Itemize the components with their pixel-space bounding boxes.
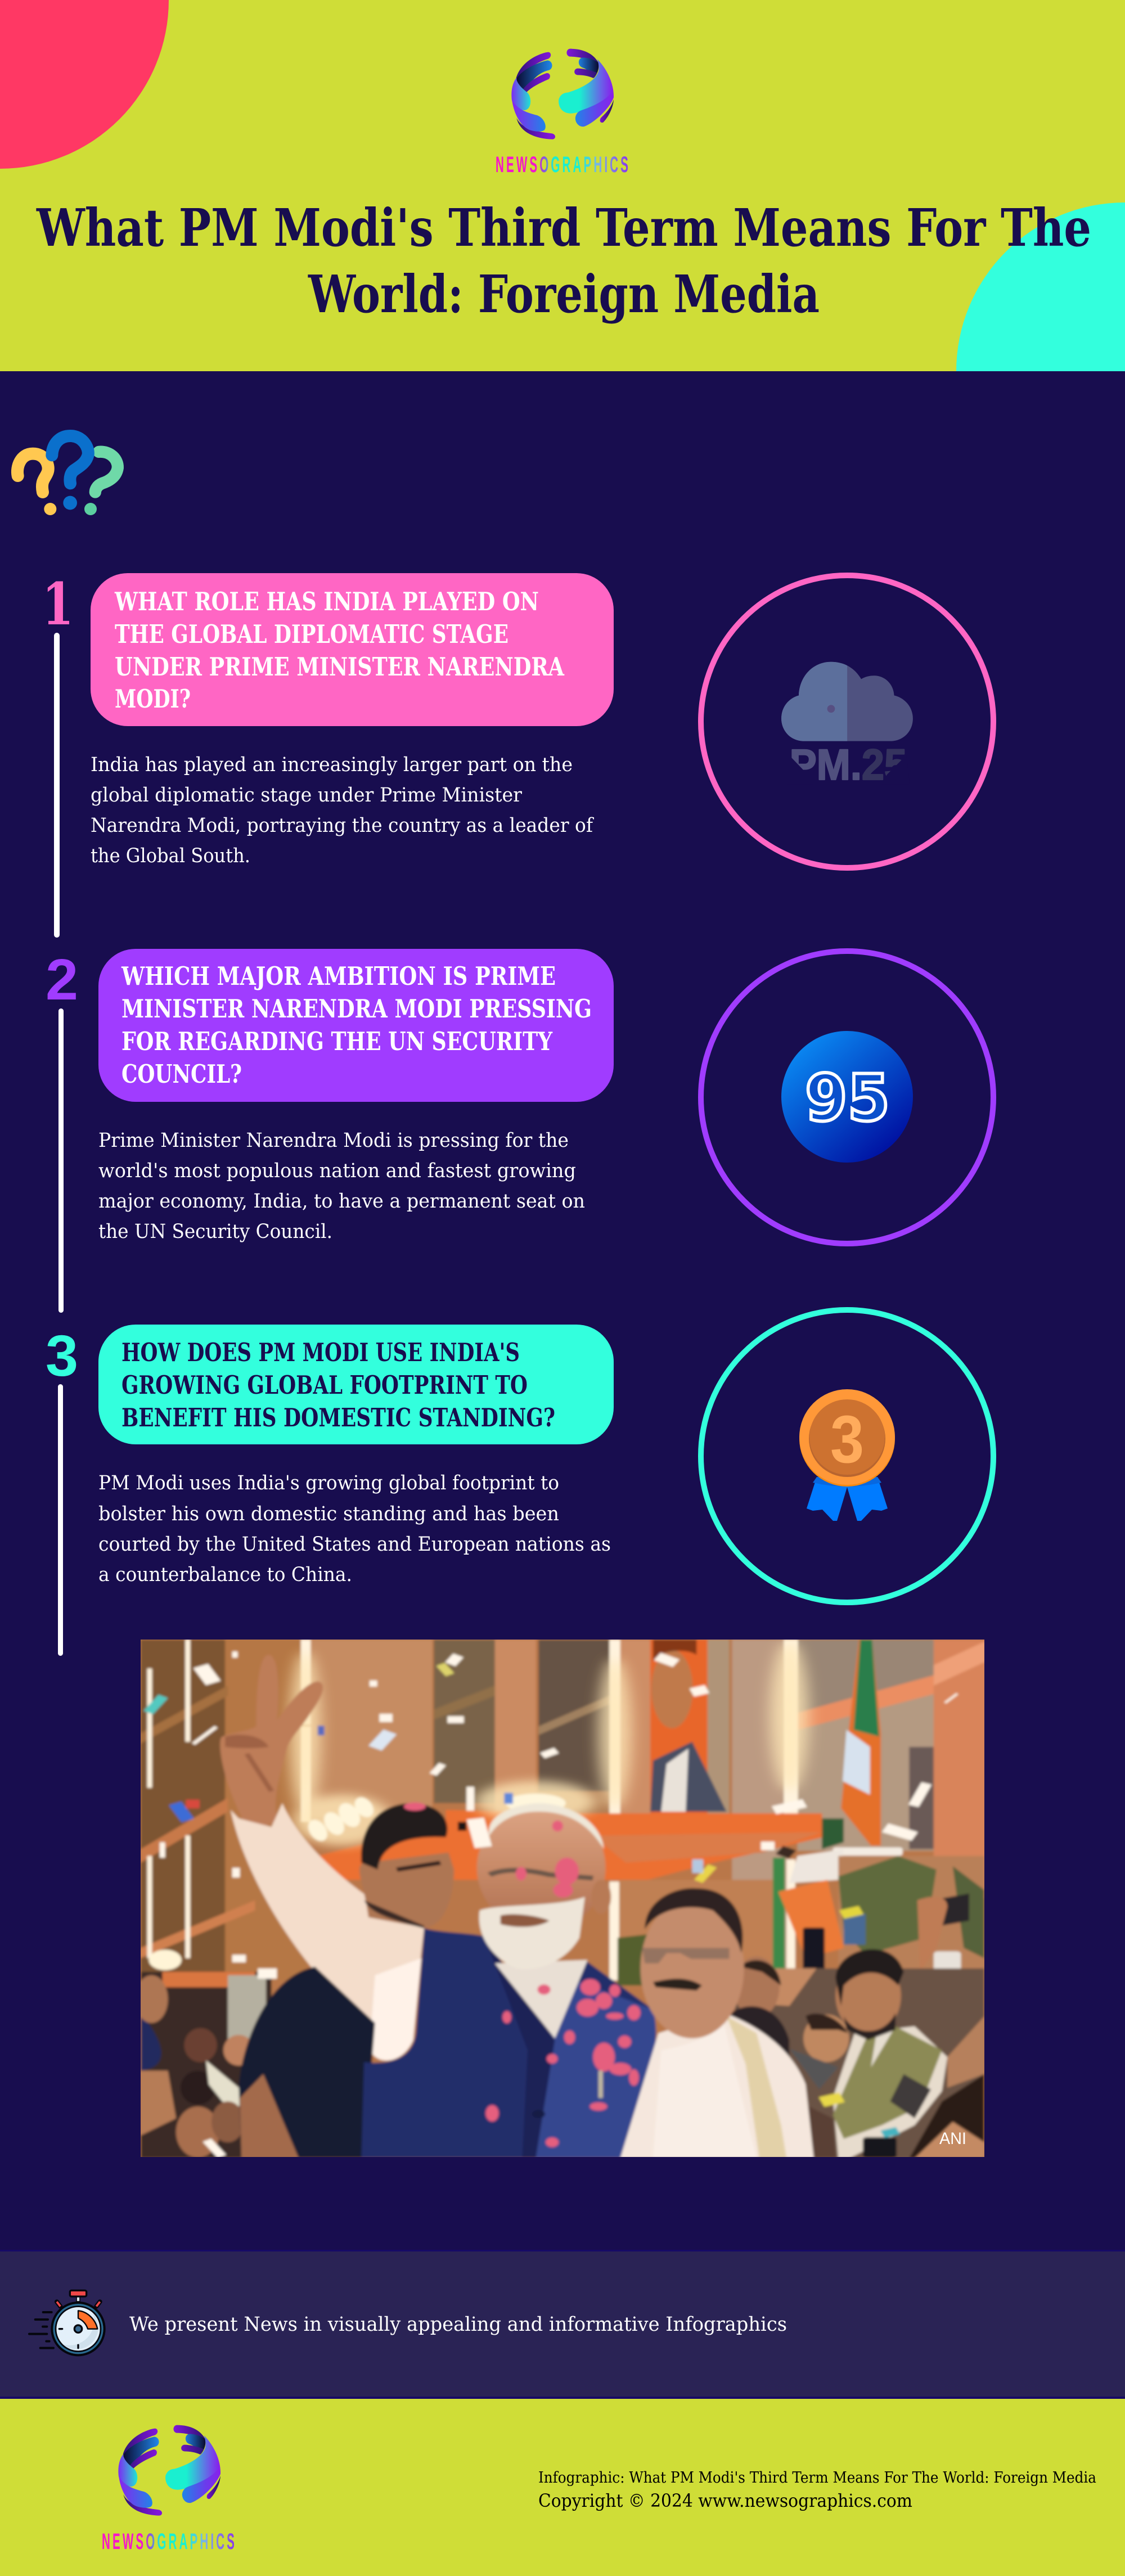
dark glass diagonal beams	[141, 1798, 228, 1863]
section 2 answer text	[98, 1129, 585, 1243]
icon: 95 badge	[781, 1031, 913, 1163]
section 1 answer text: the Global South.	[91, 845, 250, 867]
section 3 timeline bar	[58, 1384, 63, 1656]
section 3 answer text: a counterbalance to China.	[98, 1564, 352, 1586]
decorative pink quarter circle	[0, 0, 169, 169]
section 3 number: 3	[46, 1323, 78, 1388]
section 1 number: 1	[42, 570, 74, 638]
icon: PM2.5 cloud	[781, 662, 913, 789]
section 3 question pill: BENEFIT HIS DOMESTIC STANDING?	[122, 1403, 555, 1433]
building backdrop	[135, 1631, 1007, 2176]
page background	[0, 371, 1125, 2250]
section 2 question pill: WHICH MAJOR AMBITION IS PRIME	[121, 961, 556, 991]
footer band	[0, 2399, 1125, 2576]
logo: Newsographics footer	[102, 2425, 237, 2554]
section 2 question pill: COUNCIL?	[122, 1059, 242, 1089]
decorative cyan quarter circle	[956, 202, 1125, 371]
section 2 answer text: Prime Minister Narendra Modi is pressing for the	[98, 1129, 569, 1152]
footer credit text	[538, 2469, 1096, 2511]
petals on vest	[485, 1979, 641, 2147]
orange canopy structure	[318, 1810, 823, 1880]
icon: stopwatch	[29, 2290, 106, 2356]
title	[36, 197, 1091, 325]
hand making V sign	[220, 1655, 323, 1830]
section 2 answer text: the UN Security Council.	[98, 1221, 332, 1243]
logo: Newsographics footer: NEWSOGRAPHICS	[102, 2529, 237, 2554]
Modi vest	[361, 1928, 656, 2158]
section 1 answer text	[91, 754, 595, 867]
section 3 circle with medal	[701, 1310, 993, 1602]
logo: Newsographics header: NEWSOGRAPHICS	[496, 152, 631, 177]
Modi flower petals	[404, 1803, 579, 1898]
foliage and right crowd backdrop	[837, 1854, 984, 1969]
tagline text: We present News in visually appealing and informative Infographics	[129, 2313, 787, 2336]
section 1 answer text: India has played an increasingly larger part on the	[91, 754, 573, 776]
confetti	[160, 1651, 958, 2158]
section 3 answer text	[98, 1472, 611, 1586]
Modi inner kurta	[495, 1960, 588, 2038]
photo: PM Modi celebrating with confetti	[135, 1631, 1007, 2176]
icon: question marks	[17, 436, 118, 515]
section 2 answer text: world's most populous nation and fastest growing	[98, 1160, 576, 1182]
Nadda	[620, 2013, 814, 2158]
icon: 95 badge: 95	[805, 1061, 890, 1136]
section 1 answer text: global diplomatic stage under Prime Minister	[91, 784, 522, 807]
icon: PM2.5 cloud: PM.25	[790, 741, 907, 789]
poster of a man	[649, 1640, 709, 1815]
flag	[841, 1640, 881, 1846]
section 2 timeline bar	[58, 1008, 64, 1313]
Modi head	[477, 1805, 606, 1931]
section 1 timeline bar	[54, 633, 60, 938]
section 3 question pill: HOW DOES PM MODI USE INDIA'S	[122, 1337, 520, 1367]
logo: Newsographics header	[496, 49, 631, 177]
security guard	[238, 1967, 375, 2158]
buttons and pen	[532, 2110, 545, 2118]
title: World: Foreign Media	[308, 264, 820, 325]
section 3 answer text: bolster his own domestic standing and has been	[98, 1503, 559, 1525]
header band	[0, 0, 1125, 371]
tagline band	[0, 2250, 1125, 2399]
kurta sleeve	[229, 1802, 426, 2021]
section 3 answer text: PM Modi uses India's growing global footprint to	[98, 1472, 559, 1494]
section 1 question pill: THE GLOBAL DIPLOMATIC STAGE	[115, 619, 508, 649]
section 1 answer text: Narendra Modi, portraying the country as a leader of	[91, 814, 595, 837]
section 2 question pill: FOR REGARDING THE UN SECURITY	[122, 1026, 553, 1056]
section 1 circle with PM2.5 cloud icon	[701, 575, 993, 868]
left bottom crowd	[141, 1972, 272, 2158]
section 1 question pill	[91, 573, 614, 726]
bokeh lights	[290, 1641, 808, 1846]
footer credit text: Copyright © 2024 www.newsographics.com	[538, 2490, 912, 2511]
section 2 question pill	[98, 949, 614, 1102]
section 2 answer text: major economy, India, to have a permanent seat on	[98, 1190, 585, 1213]
section 1 question pill: MODI?	[115, 684, 191, 714]
lower right backdrop	[622, 1879, 774, 1966]
section 2 number: 2	[46, 947, 78, 1012]
section 1 question pill: WHAT ROLE HAS INDIA PLAYED ON	[114, 587, 539, 616]
section 2 circle with 95 badge	[701, 951, 993, 1244]
section 3 question pill	[98, 1325, 614, 1444]
section 3 answer text: courted by the United States and European nations as	[98, 1533, 611, 1556]
section 3 question pill: GROWING GLOBAL FOOTPRINT TO	[122, 1370, 528, 1400]
photo credit: ANI	[939, 2129, 966, 2148]
icon: bronze medal	[799, 1389, 895, 1521]
section 1 question pill: UNDER PRIME MINISTER NARENDRA	[115, 652, 565, 682]
right crowd	[735, 1969, 984, 2158]
icon: bronze medal: 3	[830, 1402, 864, 1477]
section 2 question pill: MINISTER NARENDRA MODI PRESSING	[122, 994, 592, 1024]
lit vertical strips	[147, 1640, 798, 1980]
